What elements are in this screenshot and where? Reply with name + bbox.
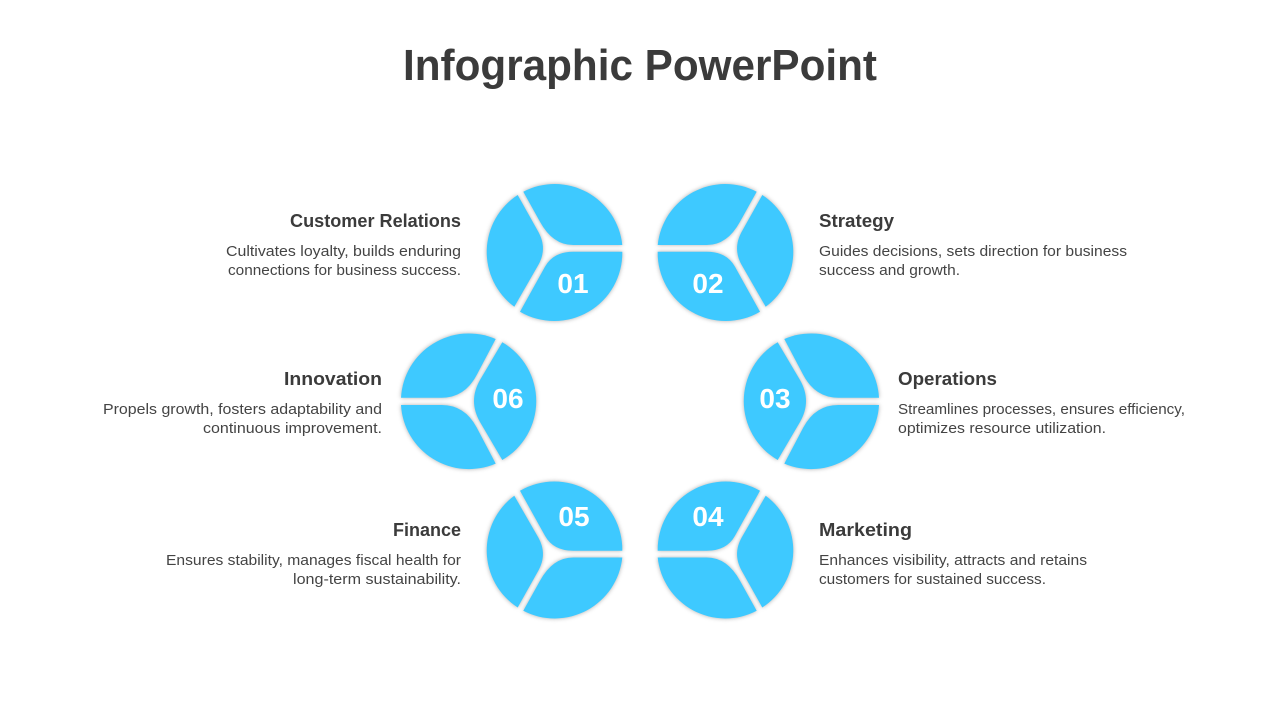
item 05: finance text: Finance [393, 520, 461, 540]
title: Infographic PowerPoint [403, 41, 877, 90]
item 02: strategy circle: 02 [692, 268, 724, 299]
item 02: strategy text [819, 211, 1127, 279]
item 02: strategy text: success and growth. [819, 262, 960, 279]
item 03: operations circle [744, 333, 879, 469]
item 02: strategy circle [658, 184, 793, 321]
item 03: operations text: Operations [898, 369, 997, 389]
item 01: customer relations circle: 01 [557, 268, 589, 299]
item 01: customer relations text: Cultivates loyalty, builds enduring [226, 243, 461, 260]
item 04: marketing text: Enhances visibility, attracts and retains [819, 552, 1087, 569]
item 05: finance circle [487, 482, 622, 618]
item 03: operations text: optimizes resource utilization. [898, 420, 1106, 437]
item 06: innovation text [103, 369, 382, 437]
item 03: operations text [898, 369, 1185, 437]
item 03: operations text: Streamlines processes, ensures efficiency, [898, 401, 1185, 418]
item 06: innovation text: Innovation [284, 369, 382, 389]
item 06: innovation circle: 06 [492, 383, 524, 414]
item 06: innovation text: continuous improvement. [203, 420, 382, 437]
item 05: finance circle: 05 [558, 501, 590, 532]
item 05: finance text: long-term sustainability. [293, 571, 461, 588]
item 06: innovation circle [401, 333, 536, 469]
item 05: finance text [166, 520, 461, 588]
item 01: customer relations text [226, 211, 461, 279]
item 01: customer relations text: connections for business success. [228, 262, 461, 279]
item 06: innovation text: Propels growth, fosters adaptability and [103, 401, 382, 418]
item 04: marketing circle [658, 482, 793, 618]
item 03: operations circle: 03 [759, 383, 791, 414]
item 02: strategy text: Guides decisions, sets direction for business [819, 243, 1127, 260]
item 04: marketing text [819, 520, 1087, 588]
item 04: marketing circle: 04 [692, 501, 724, 532]
item 02: strategy text: Strategy [819, 211, 894, 231]
item 05: finance text: Ensures stability, manages fiscal health for [166, 552, 461, 569]
item 04: marketing text: Marketing [819, 520, 912, 540]
item 01: customer relations circle [487, 184, 622, 321]
item 04: marketing text: customers for sustained success. [819, 571, 1046, 588]
item 01: customer relations text: Customer Relations [290, 211, 461, 231]
